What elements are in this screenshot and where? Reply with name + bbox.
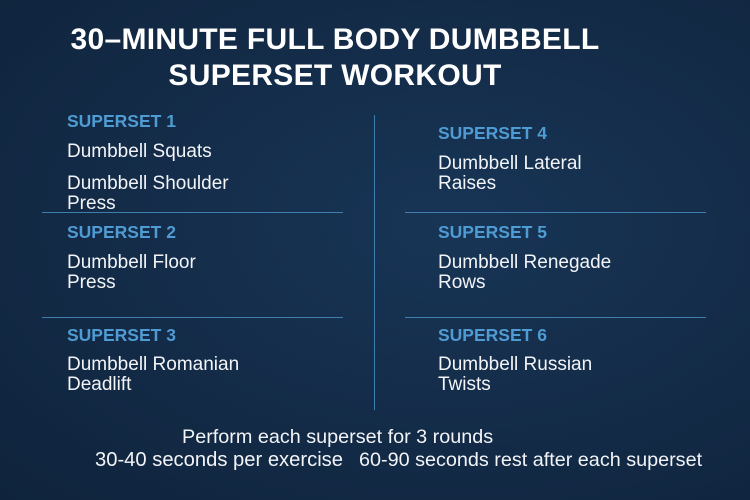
text: shoulder press: Dumbbell Shoulder — [67, 173, 229, 194]
heading: superset 3: SUPERSET 3 — [67, 325, 176, 345]
text: lateral raises — [438, 153, 582, 194]
panel: superset 1 — [67, 111, 229, 214]
heading: superset 2: SUPERSET 2 — [67, 222, 176, 242]
divider: vertical — [374, 115, 375, 410]
text: lateral raises: Raises — [438, 173, 496, 194]
text: russian twists: Dumbbell Russian — [438, 354, 592, 375]
text: shoulder press: Press — [67, 193, 116, 214]
text: rest: 60-90 seconds rest after each superset — [359, 449, 702, 471]
text: floor press: Press — [67, 272, 116, 293]
text: lateral raises: Dumbbell Lateral — [438, 153, 582, 174]
panel: superset 5 — [438, 222, 611, 293]
text: romanian deadlift: Deadlift — [67, 374, 131, 395]
text: russian twists: Twists — [438, 374, 491, 395]
text: russian twists — [438, 354, 592, 395]
heading: superset 6: SUPERSET 6 — [438, 325, 547, 345]
heading: superset 1: SUPERSET 1 — [67, 111, 176, 131]
panel: superset 6 — [438, 325, 592, 395]
text: romanian deadlift — [67, 354, 239, 395]
text: per exercise: 30-40 seconds per exercise — [95, 449, 343, 471]
text: floor press: Dumbbell Floor — [67, 252, 196, 273]
footer text: rounds: Perform each superset for 3 rounds — [182, 426, 493, 448]
text: floor press — [67, 252, 196, 293]
text: renegade rows: Rows — [438, 272, 486, 293]
text: shoulder press — [67, 173, 229, 214]
title: 30–MINUTE FULL BODY DUMBBELL — [70, 23, 600, 56]
panel: superset 4 — [438, 123, 582, 194]
text: renegade rows: Dumbbell Renegade — [438, 252, 611, 273]
footer text: timing — [95, 449, 702, 471]
heading: superset 4: SUPERSET 4 — [438, 123, 547, 143]
panel: superset 2 — [67, 222, 196, 293]
text: squats: Dumbbell Squats — [67, 141, 212, 162]
text: romanian deadlift: Dumbbell Romanian — [67, 354, 239, 375]
heading: superset 5: SUPERSET 5 — [438, 222, 547, 242]
text: renegade rows — [438, 252, 611, 293]
title — [70, 23, 600, 92]
title: SUPERSET WORKOUT — [168, 59, 502, 92]
panel: superset 3 — [67, 325, 239, 395]
